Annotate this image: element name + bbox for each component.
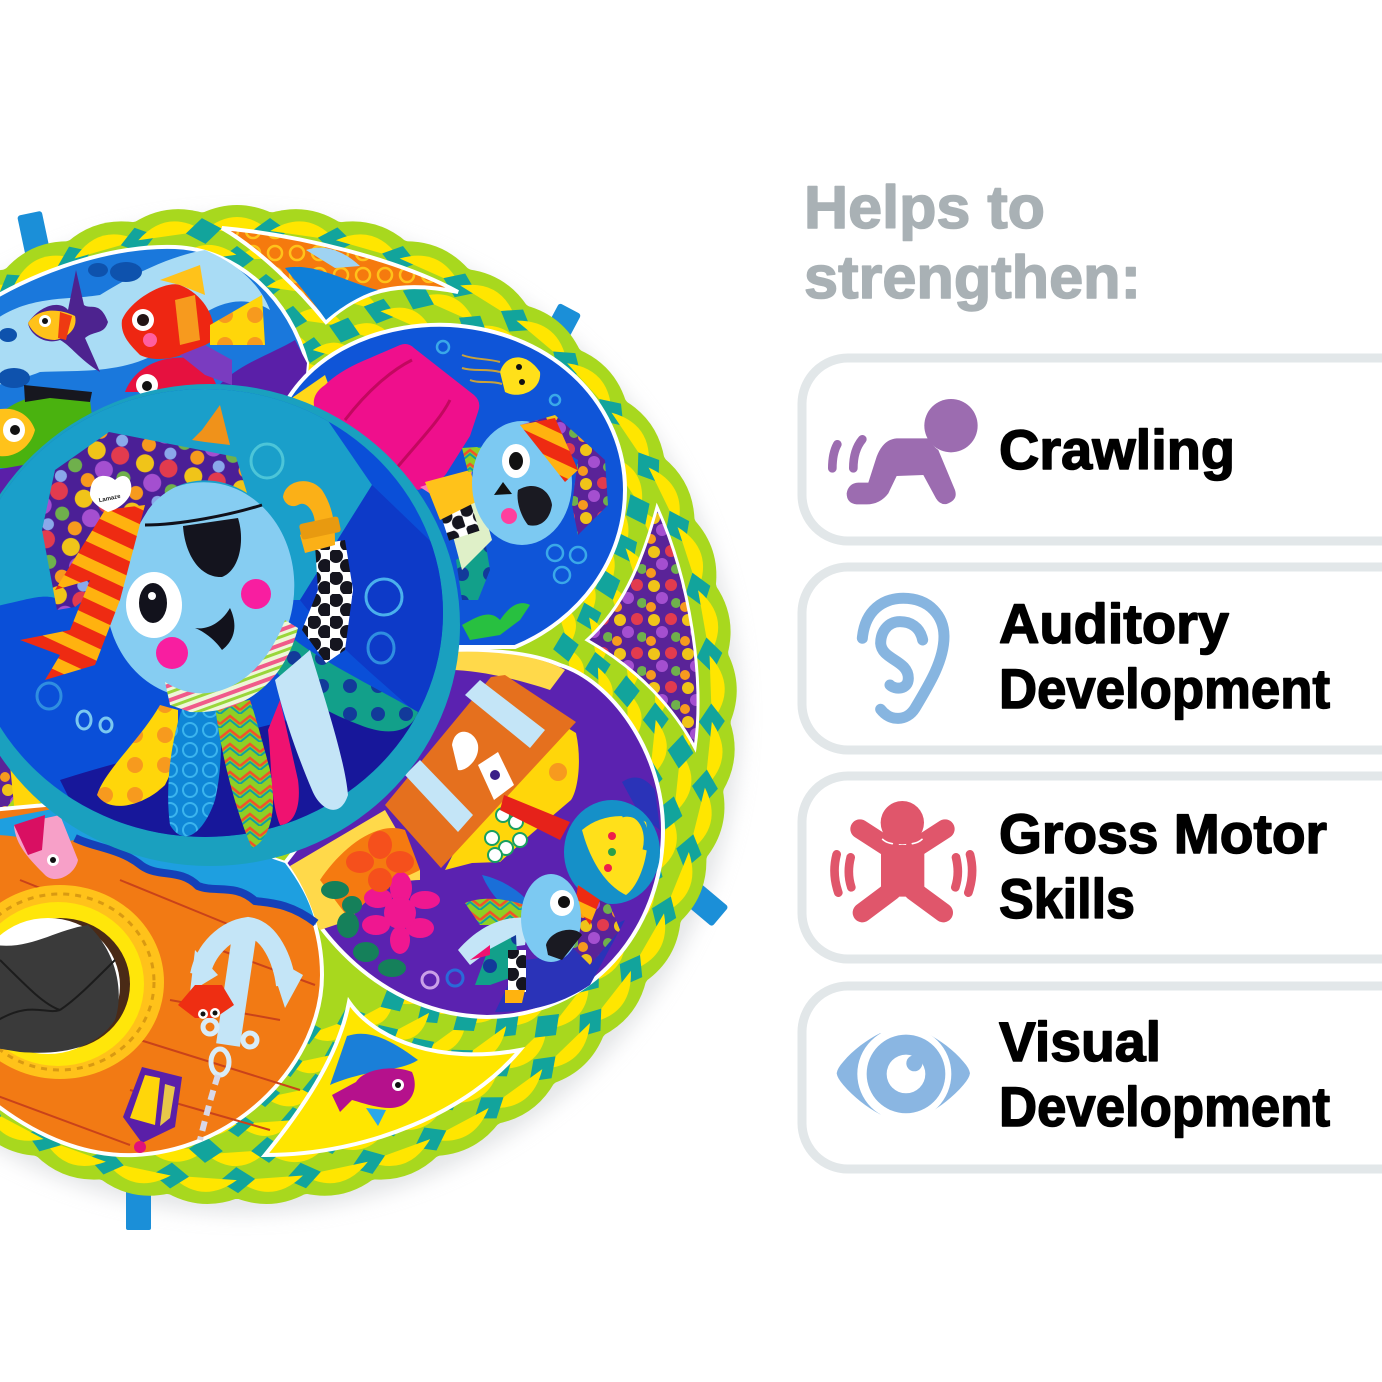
silhouette fish (0, 262, 142, 388)
hook glove (283, 481, 341, 553)
small octopus (425, 415, 608, 600)
left lower patch (0, 720, 45, 830)
heading: Helps to (804, 174, 1045, 241)
panel: orange ship disc (0, 800, 322, 1155)
central pillow disc (0, 380, 460, 866)
label: gross motor skills: Skills (999, 867, 1135, 930)
pillow inner blue disc (0, 389, 443, 837)
jellyfish (462, 355, 540, 395)
icon: baby with arms and legs out (835, 801, 972, 913)
blue tabs (17, 211, 729, 1230)
panel: gross motor skills (802, 776, 1382, 959)
lantern (123, 1067, 182, 1153)
cheeks and mouth (241, 579, 271, 609)
pink shell (314, 344, 479, 490)
play mat illustration (0, 201, 740, 1230)
eye patch (145, 505, 262, 577)
label: auditory development: Auditory (999, 592, 1229, 655)
label: crawling: Crawling (999, 418, 1235, 481)
seaweed (462, 603, 530, 640)
spotted arm (302, 540, 353, 663)
label: visual development: Development (999, 1075, 1330, 1138)
pirate hat: Lamaze (98, 494, 122, 504)
small bubbles (422, 970, 463, 988)
heading: strengthen: (804, 244, 1141, 311)
green fish (0, 385, 95, 468)
pirate eye (126, 572, 182, 638)
leaves (321, 881, 406, 977)
treasure chest (385, 675, 576, 868)
pirate hat (20, 405, 247, 680)
pink fish (125, 357, 218, 392)
icon: eye (837, 1027, 970, 1121)
striped collar (165, 620, 298, 712)
zigzag border fabric (0, 201, 740, 1208)
label: auditory development (999, 592, 1330, 720)
top triangle patch (222, 228, 458, 322)
crab (178, 985, 234, 1019)
treasure gold (445, 705, 579, 870)
bottom yellow triangle patch (265, 1002, 520, 1155)
orange flower (346, 831, 414, 892)
panel: visual development (802, 986, 1382, 1169)
panel: fish disc (0, 247, 307, 520)
pearls (485, 808, 527, 862)
label: visual development (999, 1010, 1330, 1138)
pirate head (92, 470, 308, 710)
panel: crawling (802, 358, 1382, 541)
magenta fish (332, 1068, 415, 1112)
heading (804, 174, 1141, 311)
pink flower (362, 872, 440, 954)
label: gross motor skills: Gross Motor (999, 802, 1327, 865)
mat shadow (0, 217, 740, 1213)
panel: auditory development (802, 567, 1382, 750)
pillow bubbles (37, 444, 402, 732)
lower octopus (458, 874, 620, 1003)
anchor (190, 927, 303, 1140)
ball toy (564, 800, 660, 904)
right triangle patch (587, 507, 698, 748)
lamaze logo (90, 476, 131, 512)
label: visual development: Visual (999, 1010, 1161, 1073)
pink fish peeking (14, 815, 78, 879)
bubbles (437, 341, 586, 583)
panel: upper right disc with shell and octopus (286, 325, 625, 647)
angelfish (28, 270, 108, 372)
red fish (122, 265, 265, 359)
label: auditory development: Development (999, 657, 1330, 720)
tentacles (97, 540, 418, 848)
icon: crawling baby (832, 399, 978, 504)
label: gross motor skills (999, 802, 1327, 930)
porthole (0, 885, 164, 1079)
icon: ear (862, 598, 944, 718)
panel: treasure disc (285, 650, 663, 1017)
